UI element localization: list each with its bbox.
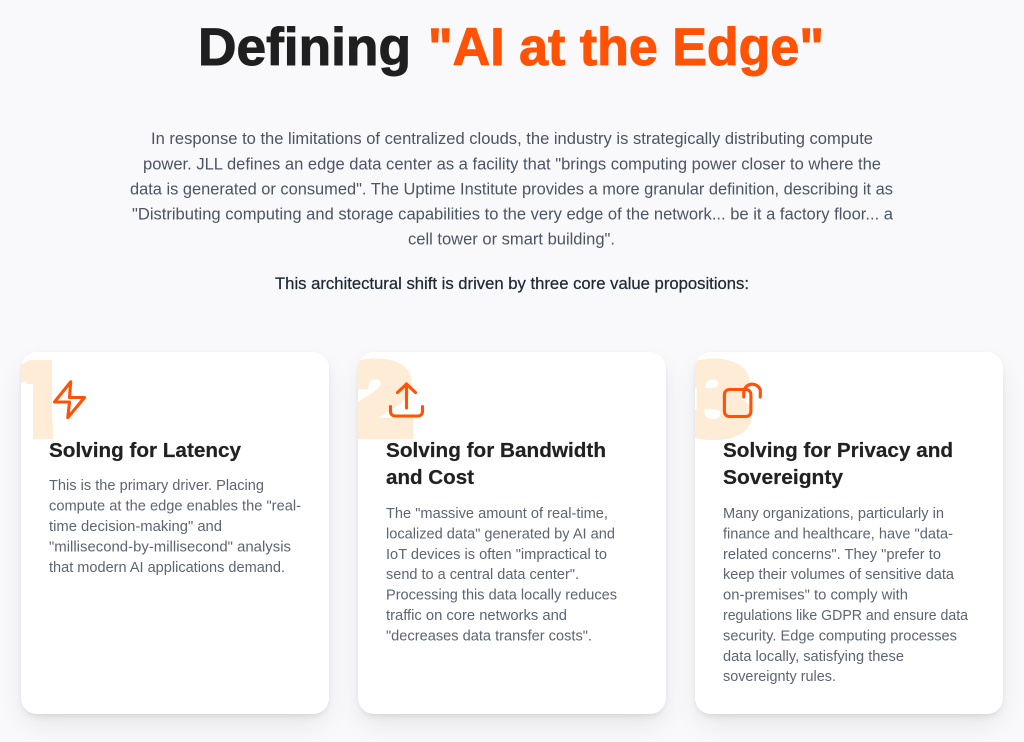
body text: keep their volumes of sensitive data <box>723 567 954 583</box>
body text: send to a central data center". <box>386 567 579 583</box>
body text: security. Edge computing processes <box>723 628 957 644</box>
body text: This is the primary driver. Placing <box>49 478 264 494</box>
heading: Sovereignty <box>723 466 844 489</box>
heading: and Cost <box>386 466 474 489</box>
body text: Processing this data locally reduces <box>386 588 617 604</box>
body text <box>723 506 968 685</box>
intro paragraph: power. JLL defines an edge data center as a facility that "brings computing power closer to where the <box>143 156 881 174</box>
panel: solving for bandwidth and cost <box>358 352 666 714</box>
heading <box>723 439 953 489</box>
body text: that modern AI applications demand. <box>49 560 285 576</box>
title <box>198 18 824 77</box>
intro paragraph: "Distributing computing and storage capabilities to the very edge of the network... be it a factory floor... a <box>132 206 894 224</box>
heading <box>386 439 606 489</box>
body text: sovereignty rules. <box>723 669 836 685</box>
icon: lightning bolt <box>54 382 84 418</box>
body text <box>49 478 301 576</box>
heading: Solving for Privacy and <box>723 439 953 462</box>
body text <box>386 506 617 644</box>
body text: finance and healthcare, have "data- <box>723 526 953 542</box>
intro paragraph: cell tower or smart building". <box>408 230 615 248</box>
body text: time decision-making" and <box>49 519 222 535</box>
body text: on-premises" to comply with <box>723 588 908 604</box>
body text: data locally, satisfying these <box>723 649 904 665</box>
body text: related concerns". They "prefer to <box>723 547 941 563</box>
intro paragraph: In response to the limitations of centralized clouds, the industry is strategically distributing compute <box>151 130 873 148</box>
body text: traffic on core networks and <box>386 608 567 624</box>
body text: "decreases data transfer costs". <box>386 628 592 644</box>
heading: Solving for Latency <box>49 439 242 462</box>
body text: compute at the edge enables the "real- <box>49 498 301 514</box>
body text: regulations like GDPR and ensure data <box>723 608 968 624</box>
body text: The "massive amount of real-time, <box>386 506 608 522</box>
header section <box>130 18 894 293</box>
body text: "millisecond-by-millisecond" analysis <box>49 540 291 556</box>
icon: upload <box>390 384 422 416</box>
body text: IoT devices is often "impractical to <box>386 547 607 563</box>
body text: localized data" generated by AI and <box>386 526 615 542</box>
intro paragraph: data is generated or consumed". The Uptime Institute provides a more granular definition, describing it as <box>130 180 893 198</box>
panel: solving for privacy and sovereignty <box>695 352 1003 714</box>
title: "AI at the Edge" <box>428 18 824 77</box>
lead-in sentence: This architectural shift is driven by three core value propositions: <box>275 275 749 293</box>
heading: Solving for Bandwidth <box>386 439 606 462</box>
intro paragraph <box>130 130 894 248</box>
icon: open lock <box>724 384 760 416</box>
body text: Many organizations, particularly in <box>723 506 944 522</box>
panel: solving for latency <box>21 352 329 714</box>
title: Defining <box>198 18 411 77</box>
